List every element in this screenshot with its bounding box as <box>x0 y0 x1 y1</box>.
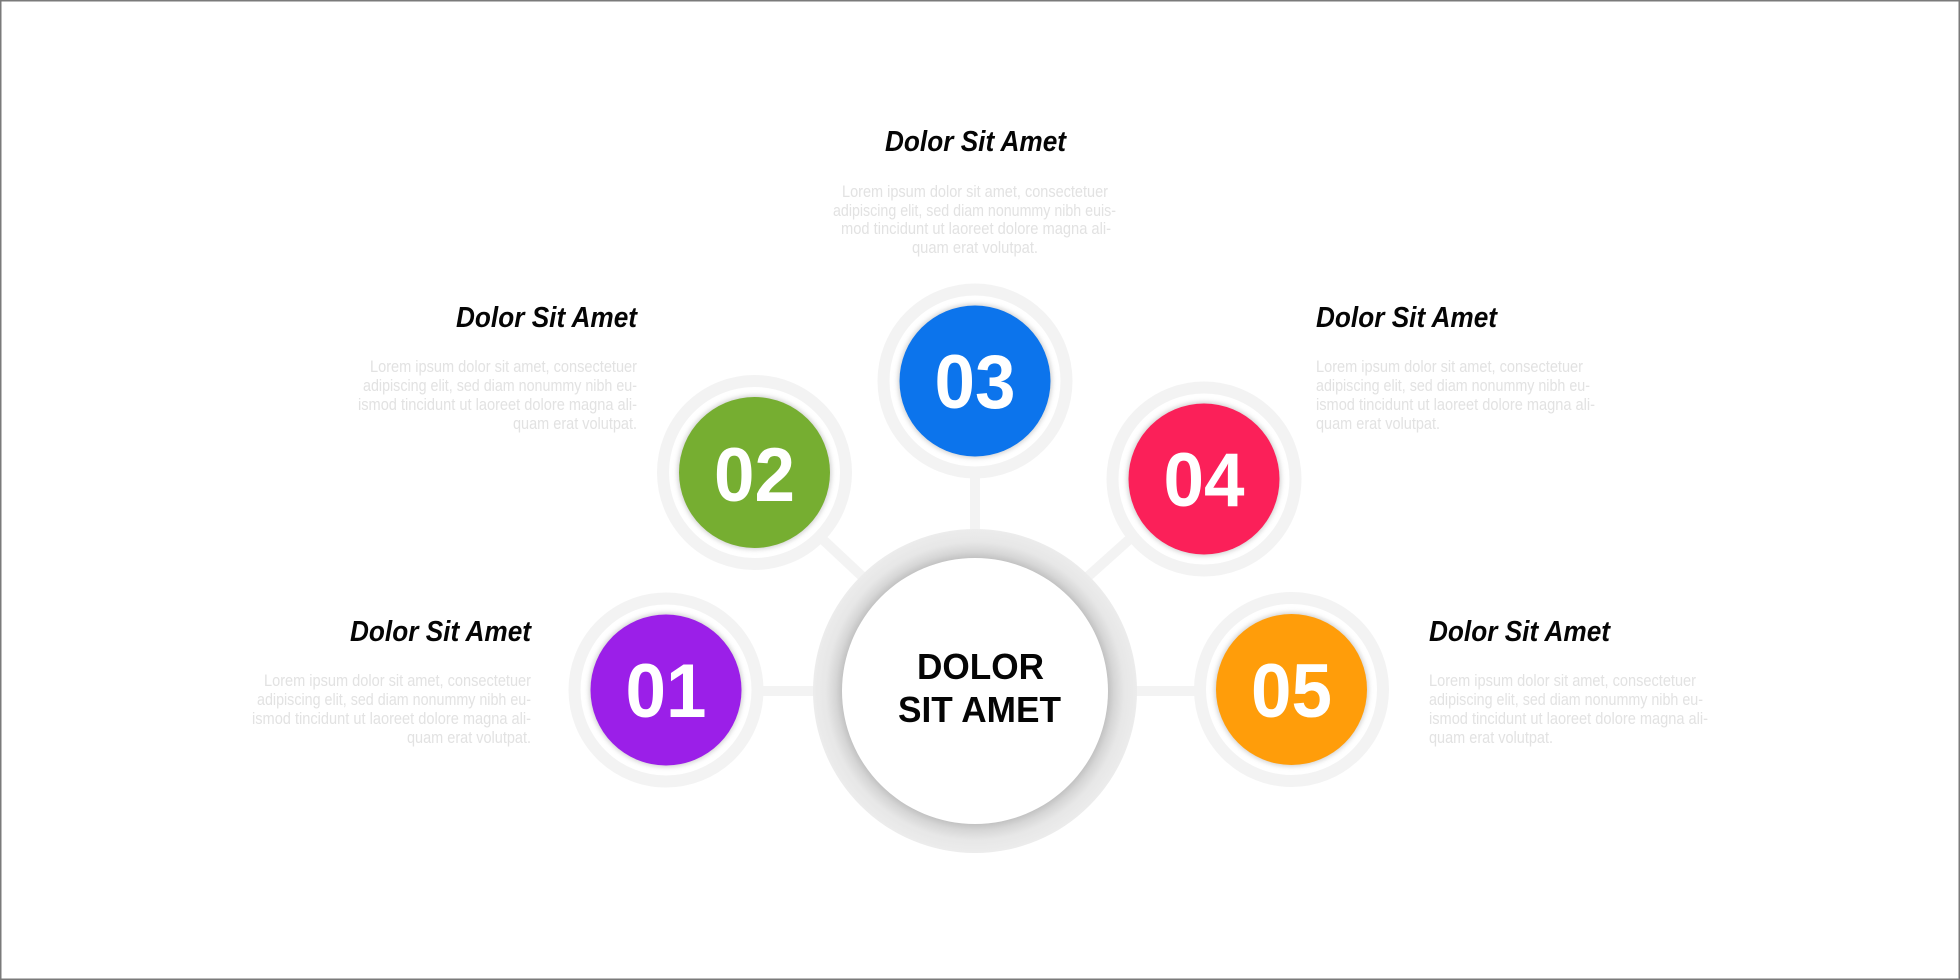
node 05 <box>1200 598 1383 781</box>
text block 04: Lorem ipsum dolor sit amet, consectetuer <box>1316 358 1583 376</box>
text block 04: quam erat volutpat. <box>1316 415 1440 433</box>
text block 03: Dolor Sit Amet <box>885 126 1067 158</box>
text block 05: quam erat volutpat. <box>1429 729 1553 747</box>
node 05: 05 <box>1251 649 1332 734</box>
node 01 <box>574 598 758 782</box>
text block 04: ismod tincidunt ut laoreet dolore magna ali- <box>1316 396 1595 414</box>
text block 05: Lorem ipsum dolor sit amet, consectetuer <box>1429 672 1696 690</box>
text block 03: adipiscing elit, sed diam nonummy nibh euis- <box>833 202 1116 220</box>
text block 05: adipiscing elit, sed diam nonummy nibh eu- <box>1429 691 1703 709</box>
text block 01 <box>252 616 532 747</box>
text block 03: mod tincidunt ut laoreet dolore magna ali- <box>841 220 1111 238</box>
text block 01: Dolor Sit Amet <box>350 616 532 648</box>
node 04 <box>1112 388 1296 570</box>
text block 01: quam erat volutpat. <box>407 729 531 747</box>
node 02: 02 <box>714 433 795 518</box>
text block 04 <box>1316 302 1595 433</box>
text block 04: adipiscing elit, sed diam nonummy nibh eu- <box>1316 377 1590 395</box>
node 03: 03 <box>934 340 1016 425</box>
text block 05 <box>1429 616 1708 747</box>
text block 01: adipiscing elit, sed diam nonummy nibh eu- <box>257 691 531 709</box>
text block 02: Dolor Sit Amet <box>456 302 638 334</box>
text block 02: adipiscing elit, sed diam nonummy nibh eu- <box>363 377 637 395</box>
text block 03: quam erat volutpat. <box>912 239 1038 257</box>
central hub <box>813 529 1137 853</box>
text block 01: ismod tincidunt ut laoreet dolore magna ali- <box>252 710 531 728</box>
hub label: SIT AMET <box>898 689 1061 730</box>
text block 04: Dolor Sit Amet <box>1316 302 1498 334</box>
text block 02: ismod tincidunt ut laoreet dolore magna ali- <box>358 396 637 414</box>
node 03 <box>884 290 1066 472</box>
node 01: 01 <box>626 649 706 734</box>
text block 02: Lorem ipsum dolor sit amet, consectetuer <box>370 358 637 376</box>
connectors <box>755 470 1200 691</box>
text block 03 <box>833 126 1116 257</box>
text block 05: ismod tincidunt ut laoreet dolore magna ali- <box>1429 710 1708 728</box>
node 04: 04 <box>1164 438 1244 523</box>
hub label <box>898 646 1061 730</box>
text block 05: Dolor Sit Amet <box>1429 616 1611 648</box>
text block 02 <box>358 302 638 433</box>
node 02 <box>663 381 846 564</box>
text block 02: quam erat volutpat. <box>513 415 637 433</box>
hub label: DOLOR <box>917 646 1044 687</box>
text block 01: Lorem ipsum dolor sit amet, consectetuer <box>264 672 531 690</box>
text block 03: Lorem ipsum dolor sit amet, consectetuer <box>842 183 1108 201</box>
